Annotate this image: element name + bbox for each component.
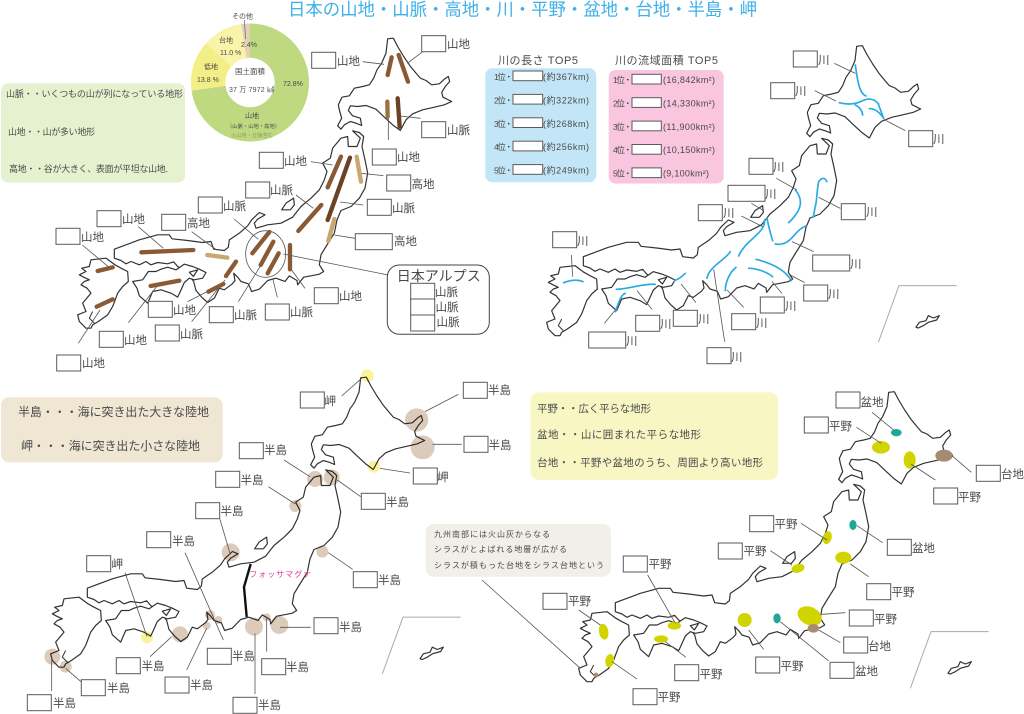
label: 山地 (99, 331, 147, 347)
donut chart: land area: 山地 (245, 111, 259, 120)
panel: Japan Alps callout: 山脈 (435, 285, 458, 299)
panel: Shirasu plateau note (426, 524, 611, 577)
map: plains outline (579, 392, 953, 682)
label: 川: 川 (818, 54, 830, 67)
panel: river basin area top 5: 1位・ (613, 75, 632, 85)
label: 川: 川 (660, 318, 672, 331)
panel: river basin area top 5: 4位・ (613, 145, 632, 155)
label: 川 (804, 285, 840, 301)
panel: river length top 5: 1位・ (494, 72, 513, 82)
label: 台地: 台地 (868, 639, 891, 653)
panel: river basin area top 5: 川の流域面積 TOP5 (615, 53, 718, 67)
label: 平野: 平野 (829, 420, 852, 433)
label: 半島 (353, 572, 401, 588)
label: 山地: 山地 (339, 290, 362, 303)
label: 山地 (312, 52, 360, 68)
label: 高地: 高地 (187, 217, 210, 230)
label: 山地 (372, 149, 420, 165)
donut chart: land area: 11.0 % (220, 50, 241, 57)
label: 山地 (259, 152, 307, 168)
label: 平野: 平野 (568, 595, 591, 608)
panel: river length top 5: 2位・ (494, 95, 513, 105)
label: 山地 (148, 301, 196, 317)
label: 山脈 (265, 304, 313, 320)
panel: river basin area top 5 (609, 53, 724, 184)
label: 山脈: 山脈 (270, 183, 293, 197)
panel: river basin area top 5: (10,150km²) (663, 145, 715, 155)
inset: Okinawa (plains map) (910, 632, 989, 688)
panel: river length top 5: 5位・ (494, 166, 513, 176)
label: 半島 (196, 503, 244, 519)
label: 平野: 平野 (874, 613, 897, 626)
panel: river length top 5: (約367km) (543, 71, 589, 82)
map: mountains outline (78, 38, 452, 328)
donut chart: land area: （山脈・山地・高地） (227, 122, 280, 130)
label: 半島: 半島 (286, 660, 309, 674)
inset: Okinawa (peninsulas map) (382, 617, 461, 674)
label: 盆地: 盆地 (860, 395, 884, 409)
label: 平野 (543, 593, 591, 609)
label: 台地 (844, 637, 891, 653)
label: 平野: 平野 (744, 545, 767, 558)
label: 山地: 山地 (124, 334, 147, 347)
label: 山地 (97, 211, 145, 227)
panel: peninsula and cape definitions (1, 397, 223, 462)
label: 半島: 半島 (172, 534, 195, 548)
label: 高地: 高地 (394, 235, 417, 248)
label: 山脈 (246, 182, 293, 198)
panel: Japan Alps callout: 山脈 (436, 300, 459, 314)
label: 川: 川 (756, 317, 768, 330)
label: 山脈 (155, 325, 203, 341)
label: 山地: 山地 (81, 231, 104, 244)
label: 半島: 半島 (240, 473, 264, 487)
label: 川 (813, 255, 862, 271)
label: 高地: 高地 (412, 178, 435, 191)
label: 高地 (162, 214, 210, 230)
label: 川: 川 (785, 300, 796, 313)
label: 川 (553, 232, 588, 248)
donut chart: land area: 13.8 % (197, 77, 219, 84)
label: 半島 (361, 493, 409, 509)
label: 岬 (413, 468, 448, 484)
label: 半島 (233, 697, 281, 713)
label: 平野: 平野 (658, 691, 681, 704)
panel: plain, basin, plateau definitions: 平野・・広く平らな地形 (537, 402, 652, 415)
panel: river length top 5: 川の長さ TOP5 (498, 54, 578, 67)
label: 山脈: 山脈 (392, 201, 415, 215)
panel: river length top 5 (485, 54, 596, 182)
label: 山地 (56, 228, 104, 244)
label: 川 (732, 314, 768, 330)
label: 半島: 半島 (142, 659, 164, 673)
label: 半島 (207, 648, 255, 664)
label: 山脈: 山脈 (223, 199, 246, 213)
panel: river basin area top 5: (11,900km²) (663, 122, 715, 132)
label: 平野: 平野 (700, 668, 723, 681)
label: 山地: 山地 (447, 38, 470, 51)
label: 川 (771, 83, 806, 99)
panel: mountain definitions: 高地・・谷が大きく、表面が平坦な山地. (9, 163, 168, 174)
panel: river length top 5: 4位・ (494, 142, 513, 152)
Fossa Magna line (244, 564, 251, 617)
panel: Shirasu plateau note: 九州南部には火山灰からなる (434, 529, 550, 539)
label: 川 (707, 348, 742, 364)
label: 半島: 半島 (190, 678, 213, 692)
label: 台地 (976, 465, 1024, 481)
label: 台地: 台地 (1001, 467, 1024, 481)
label: 盆地 (836, 392, 884, 409)
label: 盆地 (887, 539, 935, 555)
label: 岬 (300, 392, 336, 408)
label: 平野 (718, 543, 767, 559)
label: 岬: 岬 (324, 394, 336, 408)
label: 川: 川 (577, 235, 588, 248)
donut chart: land area: 国土面積 (235, 66, 265, 76)
label: 平野 (867, 584, 915, 600)
label: 山脈 (367, 199, 415, 215)
label: 半島 (464, 436, 512, 452)
label: 高地 (387, 175, 435, 191)
label: 岬 (87, 556, 123, 572)
panel: Japan Alps callout: 日本アルプス (397, 268, 481, 284)
map: peninsulas outline (51, 377, 425, 667)
mountain ranges and leader lines (78, 52, 423, 343)
panel: peninsula and cape definitions: 岬・・・海に突き出た小さな陸地 (21, 439, 200, 453)
label: 盆地 (830, 662, 878, 678)
label: 岬: 岬 (437, 470, 448, 484)
label: 半島: 半島 (107, 681, 130, 695)
label: 平野 (849, 610, 897, 626)
label: 平野: 平野 (892, 586, 915, 599)
donut chart: land area: 37 万 7972 ㎢ (229, 86, 274, 94)
label: 半島 (27, 695, 76, 711)
donut chart: land area: 台地 (219, 36, 233, 44)
label: 川 (673, 310, 710, 326)
label: 山脈: 山脈 (447, 123, 470, 137)
panel: river basin area top 5: (14,330km²) (663, 98, 715, 108)
panel: plain, basin, plateau definitions (530, 392, 778, 480)
label: 平野 (750, 516, 798, 532)
panel: river length top 5: (約256km) (543, 141, 589, 152)
label: 高地 (355, 234, 417, 250)
label: 半島: 半島 (220, 504, 244, 518)
panel: Shirasu plateau note: シラスが積もった台地をシラス台地という (434, 560, 604, 570)
panel: Japan Alps callout: 山脈 (436, 315, 460, 329)
panel: river length top 5: (約249km) (543, 165, 589, 176)
label: 山脈 (422, 122, 470, 138)
label: 川 (728, 185, 776, 201)
label: 山脈: 山脈 (234, 308, 257, 322)
label: 平野 (623, 556, 672, 572)
label: 川 (636, 315, 672, 331)
panel: plain, basin, plateau definitions: 台地・・平野や盆地のうち、周囲より高い地形 (537, 456, 764, 469)
label: 川: 川 (933, 133, 944, 146)
label: 平野: 平野 (780, 660, 804, 673)
label: 川: 川 (828, 288, 840, 301)
label: 川 (749, 158, 784, 174)
label: 平野 (934, 488, 981, 504)
label: 半島: 半島 (53, 696, 76, 710)
label: 川: 川 (795, 85, 806, 98)
donut chart: land area: その他 (232, 12, 253, 20)
inset: Okinawa (rivers map) (878, 286, 957, 342)
label: 半島: 半島 (258, 698, 281, 712)
label: 山脈 (209, 307, 257, 323)
label: 山地: 山地 (82, 357, 105, 370)
label: 半島: 半島 (264, 443, 287, 457)
label: 盆地: 盆地 (912, 541, 935, 555)
rivers and leader lines (564, 63, 905, 342)
label: 半島: 半島 (378, 573, 401, 587)
label: 半島 (239, 443, 287, 459)
donut chart: land area: 火山地・丘陵含む (231, 132, 273, 139)
label: 半島 (81, 680, 130, 696)
label: 半島 (262, 659, 309, 675)
title: 日本の山地・山脈・高地・川・平野・盆地・台地・半島・岬 (288, 0, 757, 20)
panel: mountain definitions: 山脈・・いくつもの山が列になっている地形 (6, 88, 183, 99)
Fossa Magna label: フォッサマグナ (249, 569, 311, 579)
panel: river basin area top 5: 2位・ (613, 98, 632, 108)
label: 山脈 (198, 197, 246, 213)
label: 岬: 岬 (112, 557, 123, 571)
donut chart: land area (197, 12, 303, 139)
panel: river basin area top 5: 3位・ (613, 122, 632, 132)
label: 平野 (633, 689, 681, 705)
label: 半島 (314, 618, 362, 634)
donut chart: land area: 低地 (204, 62, 218, 71)
label: 平野: 平野 (648, 558, 672, 571)
label: 半島: 半島 (488, 383, 511, 397)
panel: river length top 5: 3位・ (494, 119, 513, 129)
label: 川: 川 (626, 335, 638, 348)
label: 川: 川 (723, 207, 734, 220)
label: 山地: 山地 (284, 155, 307, 168)
label: 山地 (57, 355, 105, 371)
panel: mountain definitions (1, 83, 185, 183)
label: 半島: 半島 (232, 649, 255, 663)
panel: river basin area top 5: 5位・ (613, 169, 632, 179)
label: 平野 (804, 417, 852, 433)
label: 平野: 平野 (774, 518, 798, 531)
label: 半島 (165, 677, 213, 693)
panel: river length top 5: (約322km) (543, 94, 589, 105)
label: 川: 川 (765, 188, 776, 201)
label: 平野 (756, 657, 804, 673)
label: 山地: 山地 (173, 304, 196, 317)
panel: mountain definitions: 山地・・山が多い地形 (8, 126, 95, 137)
panel: Shirasu plateau note: シラスがとよばれる地層が広がる (434, 544, 567, 554)
label: 川 (841, 204, 878, 220)
label: 山地 (314, 288, 362, 304)
label: 平野: 平野 (958, 491, 981, 504)
panel: plain, basin, plateau definitions: 盆地・・山に囲まれた平らな地形 (537, 428, 702, 441)
panel: Japan Alps callout (387, 265, 489, 334)
label: 半島: 半島 (488, 438, 512, 452)
label: 山地 (422, 36, 470, 52)
map: rivers outline (547, 46, 921, 336)
label: 半島 (116, 658, 164, 674)
peninsula markers and leader lines (44, 369, 462, 694)
label: 山地: 山地 (122, 213, 145, 226)
label: 川 (698, 205, 734, 221)
label: 川: 川 (850, 258, 862, 271)
panel: river length top 5: (約268km) (543, 118, 589, 129)
label: 川 (589, 332, 638, 348)
label: 川 (793, 51, 830, 67)
label: 川 (760, 297, 796, 313)
label: 川: 川 (773, 161, 784, 174)
label: 半島: 半島 (386, 495, 409, 509)
label: 半島 (463, 382, 511, 398)
label: 盆地: 盆地 (855, 664, 878, 678)
label: 山地: 山地 (337, 55, 360, 68)
label: 半島 (147, 532, 195, 548)
plains, basins, plateaus and leader lines (482, 412, 971, 679)
label: 半島 (216, 471, 264, 487)
label: 川 (909, 131, 944, 147)
panel: peninsula and cape definitions: 半島・・・海に突き出た大きな陸地 (18, 404, 209, 419)
label: 山脈: 山脈 (180, 327, 203, 341)
label: 平野 (675, 665, 723, 681)
panel: river basin area top 5: (16,842km²) (663, 75, 715, 85)
donut chart: land area: 72.8% (283, 81, 303, 88)
label: 山脈: 山脈 (290, 305, 313, 319)
panel: river basin area top 5: (9,100km²) (663, 169, 709, 179)
label: 川: 川 (866, 206, 878, 219)
donut chart: land area: 2.4% (241, 42, 257, 49)
label: 山地: 山地 (397, 151, 420, 164)
label: 半島: 半島 (339, 620, 362, 634)
label: 川: 川 (698, 313, 710, 326)
label: 川: 川 (731, 351, 742, 364)
